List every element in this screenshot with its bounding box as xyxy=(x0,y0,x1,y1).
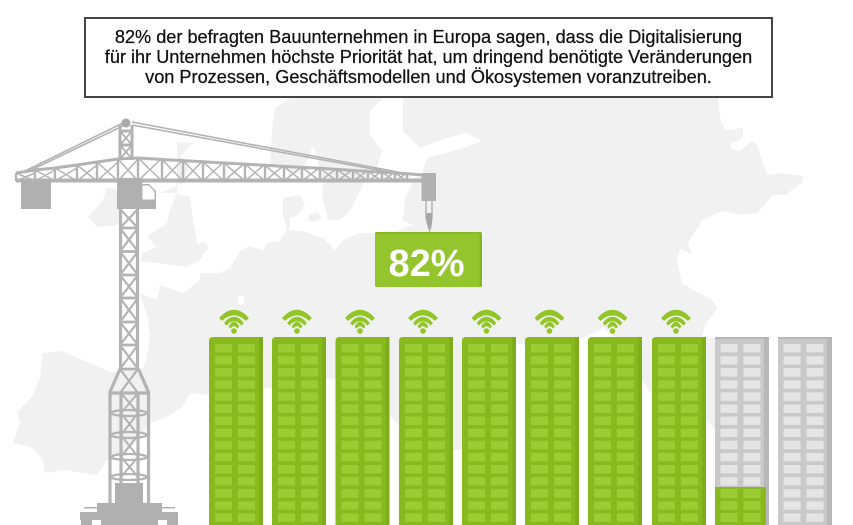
crane: operator cab xyxy=(117,178,156,209)
headline box: von Prozessen, Geschäftsmodellen und Ökosystemen voranzutreiben. xyxy=(145,67,712,87)
headline box: 82% der befragten Bauunternehmen in Europa sagen, dass die Digitalisierung xyxy=(115,27,742,47)
crane: counterweight xyxy=(21,181,51,209)
map: continental Europe xyxy=(13,98,803,475)
green fill at building base xyxy=(715,487,766,525)
crane: lower mast xyxy=(110,369,148,503)
crane: upper mast xyxy=(120,118,132,160)
map: coastal island xyxy=(198,242,208,252)
sign value: 82% xyxy=(388,243,465,285)
green digitised buildings xyxy=(209,337,706,525)
wifi icons above connected buildings xyxy=(220,310,690,334)
headline box: für ihr Unternehmen höchste Priorität hat, um dringend benötigte Veränderungen xyxy=(105,47,752,67)
tower crane xyxy=(16,118,424,525)
map: Ireland xyxy=(88,188,125,227)
headline box xyxy=(84,17,773,98)
crane hook xyxy=(422,173,436,235)
map: lake xyxy=(238,295,244,305)
map: Baltic island xyxy=(308,212,321,222)
crane: cables xyxy=(23,122,403,174)
map: Scandinavia xyxy=(270,98,383,220)
grey building partly filled green xyxy=(715,337,769,525)
background map of Europe xyxy=(13,98,803,475)
crane: jib lattice xyxy=(16,158,424,181)
map: Great Britain xyxy=(140,142,208,267)
percentage sign xyxy=(375,232,482,287)
grey building xyxy=(778,337,832,525)
crane: base xyxy=(80,483,178,525)
crane: main mast xyxy=(120,209,138,393)
